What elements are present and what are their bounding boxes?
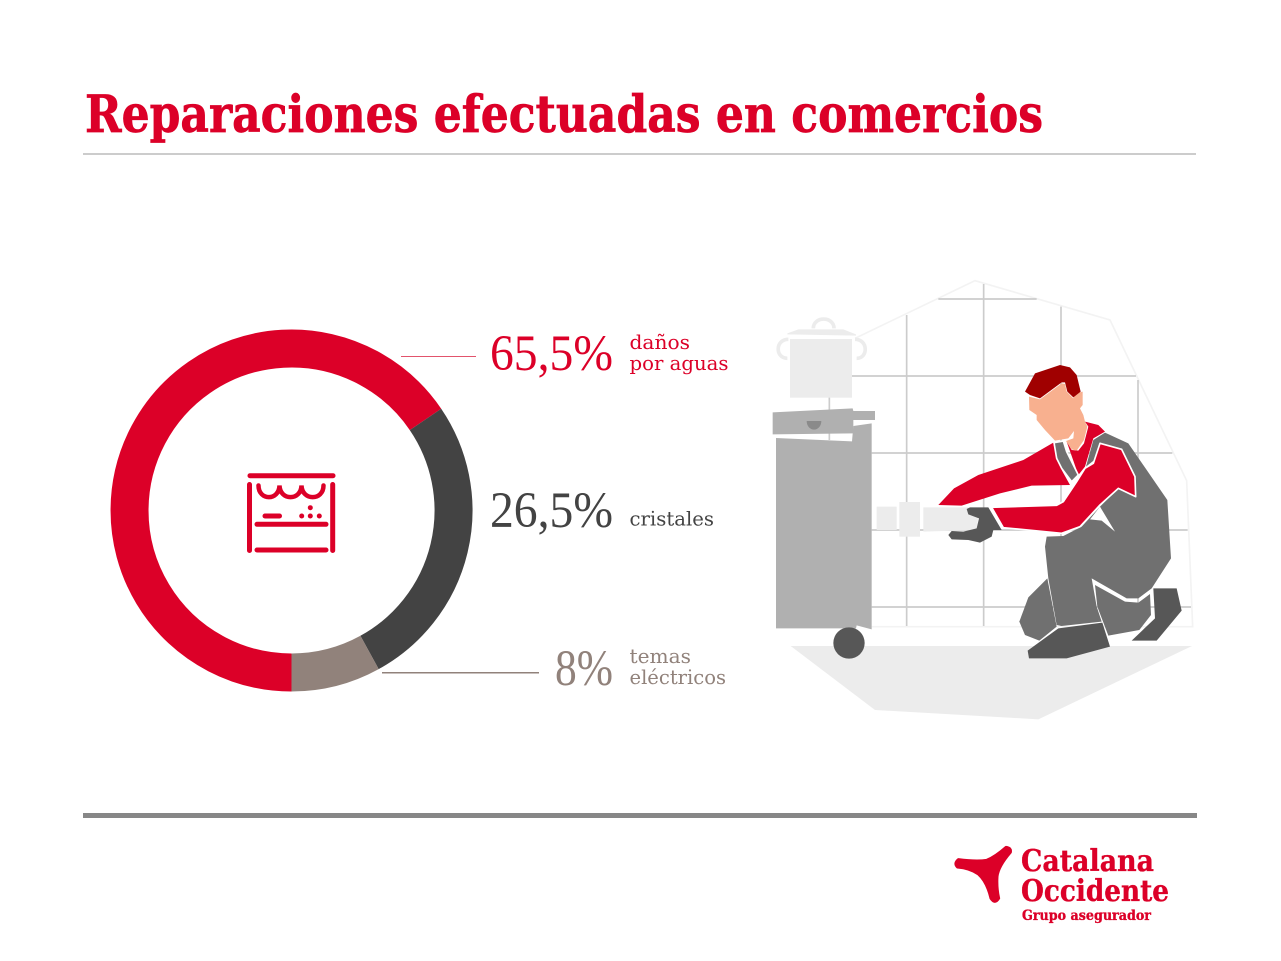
segment: 8% temas eléctricos [292, 652, 370, 672]
logo text: Grupo asegurador [1022, 908, 1152, 924]
callout: 65,5% daños por aguas: por aguas [630, 351, 728, 375]
front boot [1028, 623, 1110, 658]
back leg [1019, 578, 1057, 641]
wall outline [855, 281, 1193, 627]
overalls [1045, 433, 1171, 626]
head and neck [1029, 383, 1087, 451]
donut chart [130, 349, 454, 672]
segment: 65,5% daños por aguas [130, 349, 425, 672]
illustration: repair technician at an oven [773, 281, 1193, 719]
title: Reparaciones efectuadas en comercios [85, 85, 1043, 145]
callout: 8% temas eléctricos: temas [630, 644, 691, 668]
overalls crease [1090, 507, 1115, 532]
callout: 26,5% cristales: 26,5% [490, 483, 613, 539]
callout: 8% temas eléctricos: eléctricos [630, 665, 726, 689]
front arm [992, 443, 1136, 533]
logo text [1021, 844, 1169, 924]
callout: 65,5% daños por aguas: daños [630, 330, 690, 354]
hair [1025, 365, 1081, 398]
floor [791, 646, 1192, 719]
callout: 65,5% daños por aguas [401, 326, 728, 382]
back arm [938, 443, 1070, 506]
logo text: Catalana [1021, 844, 1154, 879]
front lower leg [1095, 585, 1151, 636]
callout: 26,5% cristales [490, 483, 714, 539]
segment: 26,5% cristales [370, 419, 454, 652]
logo text: Occidente [1021, 874, 1169, 909]
hand [948, 507, 1002, 543]
callout: 8% temas eléctricos: 8% [555, 641, 613, 697]
oven [773, 408, 875, 659]
technician [938, 365, 1182, 658]
callout: 26,5% cristales: cristales [630, 506, 714, 530]
callout: 65,5% daños por aguas: 65,5% [490, 326, 613, 382]
tile grid [829, 284, 1191, 626]
chest [1067, 422, 1105, 475]
logo mark [956, 847, 1011, 902]
logo: Catalana Occidente [956, 844, 1169, 924]
callout: 8% temas eléctricos [382, 641, 726, 697]
back boot [1132, 588, 1182, 641]
pipe [877, 502, 978, 537]
strap [1054, 441, 1078, 482]
icon: shop storefront [250, 476, 333, 550]
cooking pot [778, 319, 865, 398]
